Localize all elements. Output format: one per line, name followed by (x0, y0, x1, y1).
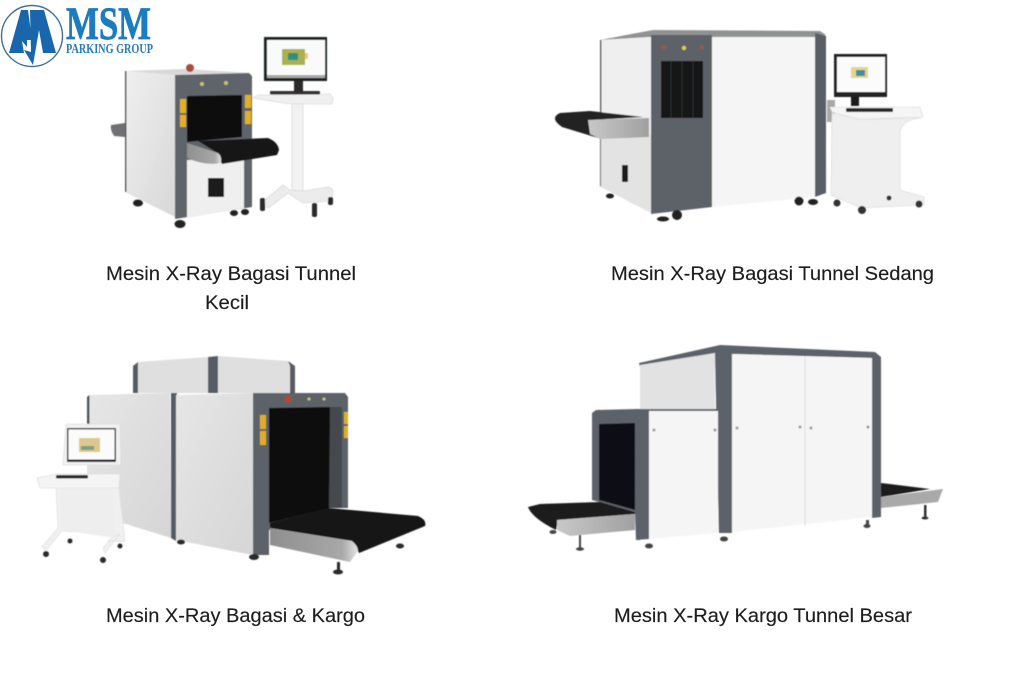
conveyor belt (270, 508, 425, 553)
feet (177, 540, 404, 574)
operator console (37, 424, 125, 563)
operator stand (253, 91, 333, 217)
vent (661, 61, 703, 118)
logo tagline: PARKING GROUP (66, 42, 153, 57)
feet (606, 194, 818, 222)
machine: medium tunnel (555, 30, 924, 222)
caption: baggage and cargo: Mesin X-Ray Bagasi & Kargo (106, 605, 365, 627)
upper left panel (640, 353, 715, 409)
yellow labels (260, 412, 348, 445)
rear belt stub (111, 123, 125, 137)
monitor (834, 54, 887, 106)
body (125, 69, 252, 75)
feet (550, 520, 870, 551)
logo: MSM Parking Group (2, 0, 153, 66)
logo emblem (2, 6, 62, 66)
right conveyor (881, 483, 930, 497)
conveyor belt (198, 138, 279, 164)
caption: large cargo tunnel: Mesin X-Ray Kargo Tunnel Besar (614, 605, 913, 627)
indicators (662, 45, 666, 49)
frame (639, 345, 881, 533)
lower panel (635, 409, 649, 540)
rear section (133, 357, 208, 393)
column (715, 348, 732, 533)
gray frame (253, 393, 348, 555)
conveyor belt (555, 111, 643, 138)
machine: baggage and cargo (37, 356, 425, 574)
machine: small tunnel (111, 37, 333, 228)
operator desk (827, 100, 924, 214)
left conveyor (528, 502, 635, 530)
caption: small tunnel second line: Kecil (205, 292, 249, 314)
monitor (264, 37, 327, 92)
tunnel entry (592, 409, 640, 540)
front panels (87, 393, 171, 538)
casters (133, 200, 249, 228)
caption: small tunnel: Mesin X-Ray Bagasi Tunnel (106, 263, 356, 285)
machine: large cargo tunnel (528, 345, 943, 551)
yellow labels (180, 95, 251, 127)
body (600, 30, 826, 40)
caption: medium tunnel: Mesin X-Ray Bagasi Tunnel Sedang (611, 263, 934, 285)
main doors (732, 354, 872, 532)
